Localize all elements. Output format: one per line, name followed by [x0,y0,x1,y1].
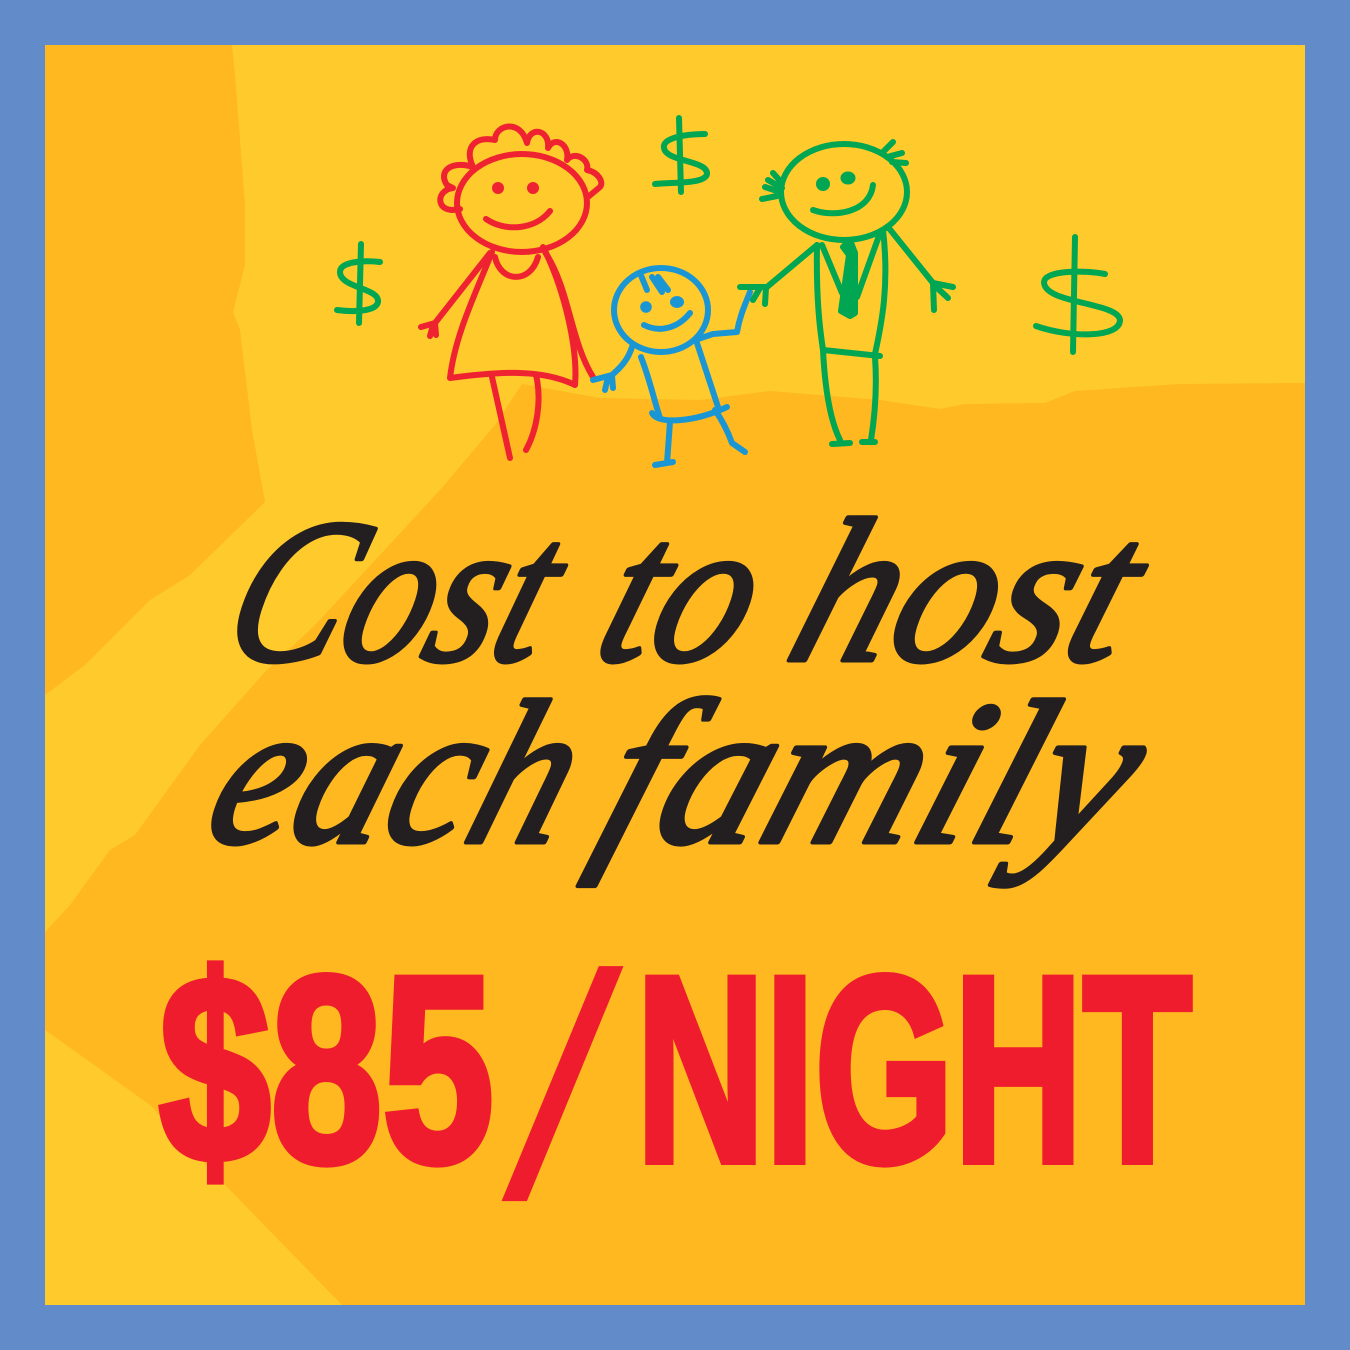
price amount: $85 [159,922,494,1218]
icon: dollar sign top [655,118,707,192]
icon: father figure [740,142,953,444]
heading word: Cost: Cost [202,479,595,705]
heading word: to: to [575,479,794,705]
price slash: / [492,909,633,1267]
icon: mother figure [421,126,601,458]
heading word: each: each [185,661,612,887]
icon: child figure [593,268,750,465]
heading word: host: host [767,479,1175,705]
illustration: stick-figure family with dollar signs [337,118,1120,465]
heading: cost to host each family [185,479,1175,887]
icon: dollar sign right [1036,237,1120,352]
heading word: family: family [575,661,1175,887]
icon: dollar sign left [337,244,380,323]
price: $85/night [159,909,1192,1267]
